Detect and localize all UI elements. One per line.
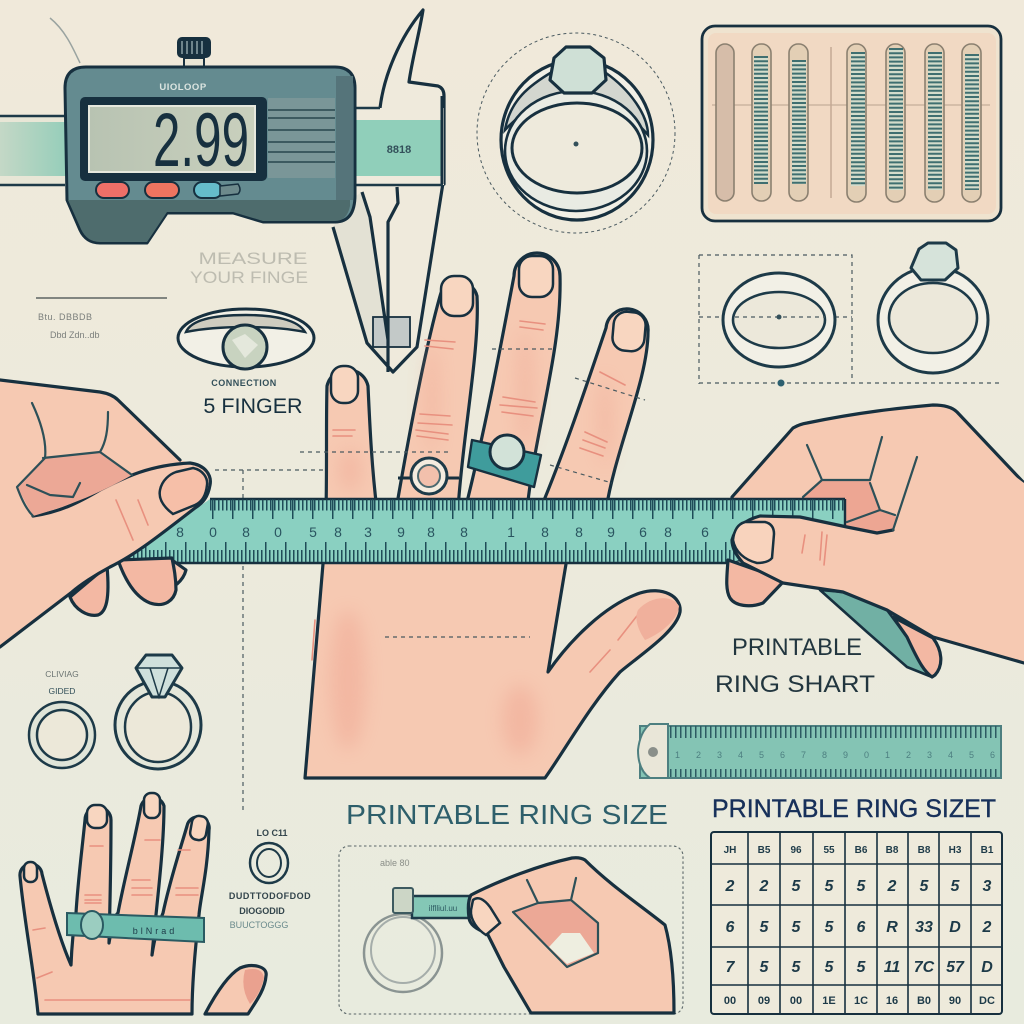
table row 5: DC xyxy=(979,995,995,1007)
right thumb nail xyxy=(733,522,774,563)
small ring diagram xyxy=(250,843,288,883)
caliper buttons xyxy=(96,182,240,198)
caliper beam xyxy=(0,96,444,185)
heading: printable ring size: PRINTABLE RING SIZE xyxy=(346,799,668,830)
small ruler xyxy=(638,724,1001,778)
tape strip xyxy=(412,896,476,918)
left hand xyxy=(0,380,210,647)
caliper scale label: 8818 xyxy=(387,144,411,156)
pinky finger xyxy=(326,370,377,510)
table row 2: 5 xyxy=(792,878,802,895)
table row 2: 2 xyxy=(725,878,735,895)
table row 2: 5 xyxy=(951,878,961,895)
right hand back xyxy=(732,405,1024,560)
left hand pocket xyxy=(17,452,132,516)
middle finger xyxy=(465,253,560,510)
table header row: B6 xyxy=(855,845,868,856)
tray slots xyxy=(716,44,981,202)
caliper display xyxy=(80,97,267,183)
ring outline dashed frame xyxy=(699,255,1000,384)
table row 2: 2 xyxy=(759,878,769,895)
caption: measure your finger: MEASURE xyxy=(198,249,308,268)
table row 3: D xyxy=(949,919,961,936)
table row 2: 2 xyxy=(887,878,897,895)
small notes: Btu. DBBDB xyxy=(38,312,93,322)
left thumb creases xyxy=(116,500,148,540)
tray coils xyxy=(761,48,972,190)
ring on ring finger xyxy=(398,458,459,494)
table row 3: 5 xyxy=(792,919,802,936)
thumb creases xyxy=(802,532,827,565)
table row 5: B0 xyxy=(917,995,931,1007)
table header row: 55 xyxy=(823,845,835,856)
small ring labels: DUDTTODOFDOD xyxy=(229,891,311,901)
teal ring on middle finger xyxy=(468,435,541,487)
left lower fingers xyxy=(70,558,186,615)
ring finger xyxy=(396,281,477,510)
small ring labels: LO C11 xyxy=(256,828,288,838)
table header row: 96 xyxy=(790,845,802,856)
panel: ring sizer demo: ilflliul.uu xyxy=(429,904,457,913)
measuring tape main xyxy=(120,499,845,563)
thumb nail xyxy=(636,598,679,640)
left thumb nail xyxy=(160,468,207,514)
printable ring chart caption: RING SHART xyxy=(715,671,875,698)
small label above band ring: CLIVIAG xyxy=(45,669,79,679)
table header row: H3 xyxy=(949,845,962,856)
teal ring band xyxy=(67,911,204,942)
left palm and thumb xyxy=(0,380,210,647)
diamond ring right xyxy=(878,243,988,373)
small hand bottom left xyxy=(20,793,209,1014)
printable ring chart caption: PRINTABLE xyxy=(732,634,862,661)
table row 2: 5 xyxy=(857,878,867,895)
bottom thumb xyxy=(205,966,266,1014)
table row 3: 5 xyxy=(760,919,770,936)
ring size table xyxy=(711,832,1002,1014)
palm and thumb xyxy=(305,540,680,778)
demo thumb nail xyxy=(471,898,500,935)
caption: measure your finger: YOUR FINGE xyxy=(190,268,308,287)
tape numbers: 80805839881889686 xyxy=(176,524,709,540)
table row 5 xyxy=(724,995,995,1007)
central hand xyxy=(300,253,680,778)
teal ring band: blNrad xyxy=(133,926,177,936)
index finger xyxy=(540,309,648,510)
display reading: 2.99 xyxy=(153,98,249,183)
table row 5: 00 xyxy=(790,995,802,1007)
heading: printable ring sizet: PRINTABLE RING SIZET xyxy=(712,795,996,823)
right lower finger xyxy=(727,560,785,606)
printable ring chart caption xyxy=(715,634,875,698)
small notes xyxy=(36,298,167,340)
table row 4 xyxy=(726,959,993,976)
table row 3: R xyxy=(886,919,898,936)
ring sizer tray xyxy=(702,26,1001,221)
small ring labels: BUUCTOGGG xyxy=(230,920,288,930)
caption: 5 finger: 5 FINGER xyxy=(203,394,303,418)
small ring with diamond xyxy=(178,309,314,369)
table row 4: 11 xyxy=(884,959,900,976)
gemstone xyxy=(550,47,606,93)
small notes: Dbd Zdn..db xyxy=(50,330,100,340)
clear ring xyxy=(364,914,442,992)
small ring labels xyxy=(229,828,311,930)
table header row: B8 xyxy=(886,845,899,856)
caliper lower jaw xyxy=(333,183,443,372)
table row 2: 3 xyxy=(983,878,992,895)
caliper vent xyxy=(268,98,335,178)
table row 5: 16 xyxy=(886,995,898,1007)
small label above band ring: GIDED xyxy=(49,686,75,696)
far finger xyxy=(893,617,941,677)
table row 3: 33 xyxy=(915,919,933,936)
skin shading xyxy=(330,330,611,755)
table row 5: 00 xyxy=(724,995,736,1007)
table row 4: 7C xyxy=(914,959,935,976)
table header row: B5 xyxy=(758,845,771,856)
caption: 5 finger: CONNECTION xyxy=(211,378,277,388)
table row 5: 1E xyxy=(822,995,836,1007)
table row 2: 5 xyxy=(825,878,835,895)
ring gem xyxy=(393,888,413,913)
table row 3 xyxy=(726,919,992,936)
table row 4: D xyxy=(981,959,993,976)
panel: ring sizer demo xyxy=(339,846,683,1014)
table header row: B8 xyxy=(918,845,931,856)
large ring diagram xyxy=(477,33,675,233)
table row 3: 5 xyxy=(825,919,835,936)
table header row: JH xyxy=(724,845,736,856)
bottom hand creases xyxy=(33,840,198,1000)
table row 4: 5 xyxy=(825,959,835,976)
table row 3: 6 xyxy=(857,919,866,936)
small label above band ring xyxy=(45,669,79,696)
caliper xyxy=(0,10,444,372)
table row 4: 5 xyxy=(857,959,867,976)
caliper cable line xyxy=(50,18,80,63)
table header row: B1 xyxy=(981,845,994,856)
demo hand xyxy=(468,858,674,1013)
small ring labels: DIOGODID xyxy=(239,906,285,916)
caliper upper jaw xyxy=(380,10,444,184)
table row 5: 1C xyxy=(854,995,868,1007)
palm and thumb xyxy=(732,415,1024,663)
demo hand pocket xyxy=(513,900,598,967)
table row 4: 5 xyxy=(760,959,770,976)
table row 4: 5 xyxy=(792,959,802,976)
dashed finger guide xyxy=(300,349,645,637)
teal tape tail xyxy=(820,590,932,677)
bottom hand nails xyxy=(24,793,209,882)
caliper brand text: UIOLOOP xyxy=(159,82,207,93)
small ruler: 1 2 3 4 5 6 7 8 9 0 1 2 3 4 5 6 xyxy=(675,750,995,760)
table row 2 xyxy=(725,878,992,895)
oval ring xyxy=(723,273,835,386)
table row 5: 90 xyxy=(949,995,961,1007)
table header row xyxy=(724,845,994,856)
caption: 5 finger xyxy=(203,378,303,418)
tall diamond ring left xyxy=(115,655,201,769)
caption: measure your finger xyxy=(190,249,308,287)
table row 5: 09 xyxy=(758,995,770,1007)
table row 4: 7 xyxy=(726,959,736,976)
finger creases xyxy=(312,321,640,672)
plain band ring left xyxy=(29,702,95,768)
table row 3: 2 xyxy=(982,919,992,936)
caliper body xyxy=(65,67,355,243)
table row 3: 6 xyxy=(726,919,735,936)
caliper knob xyxy=(177,37,211,68)
guide dashed lines xyxy=(215,470,325,810)
demo note: able 80 xyxy=(380,858,410,868)
table row 4: 57 xyxy=(946,959,965,976)
right hand front xyxy=(727,415,1024,677)
table row 2: 5 xyxy=(920,878,930,895)
